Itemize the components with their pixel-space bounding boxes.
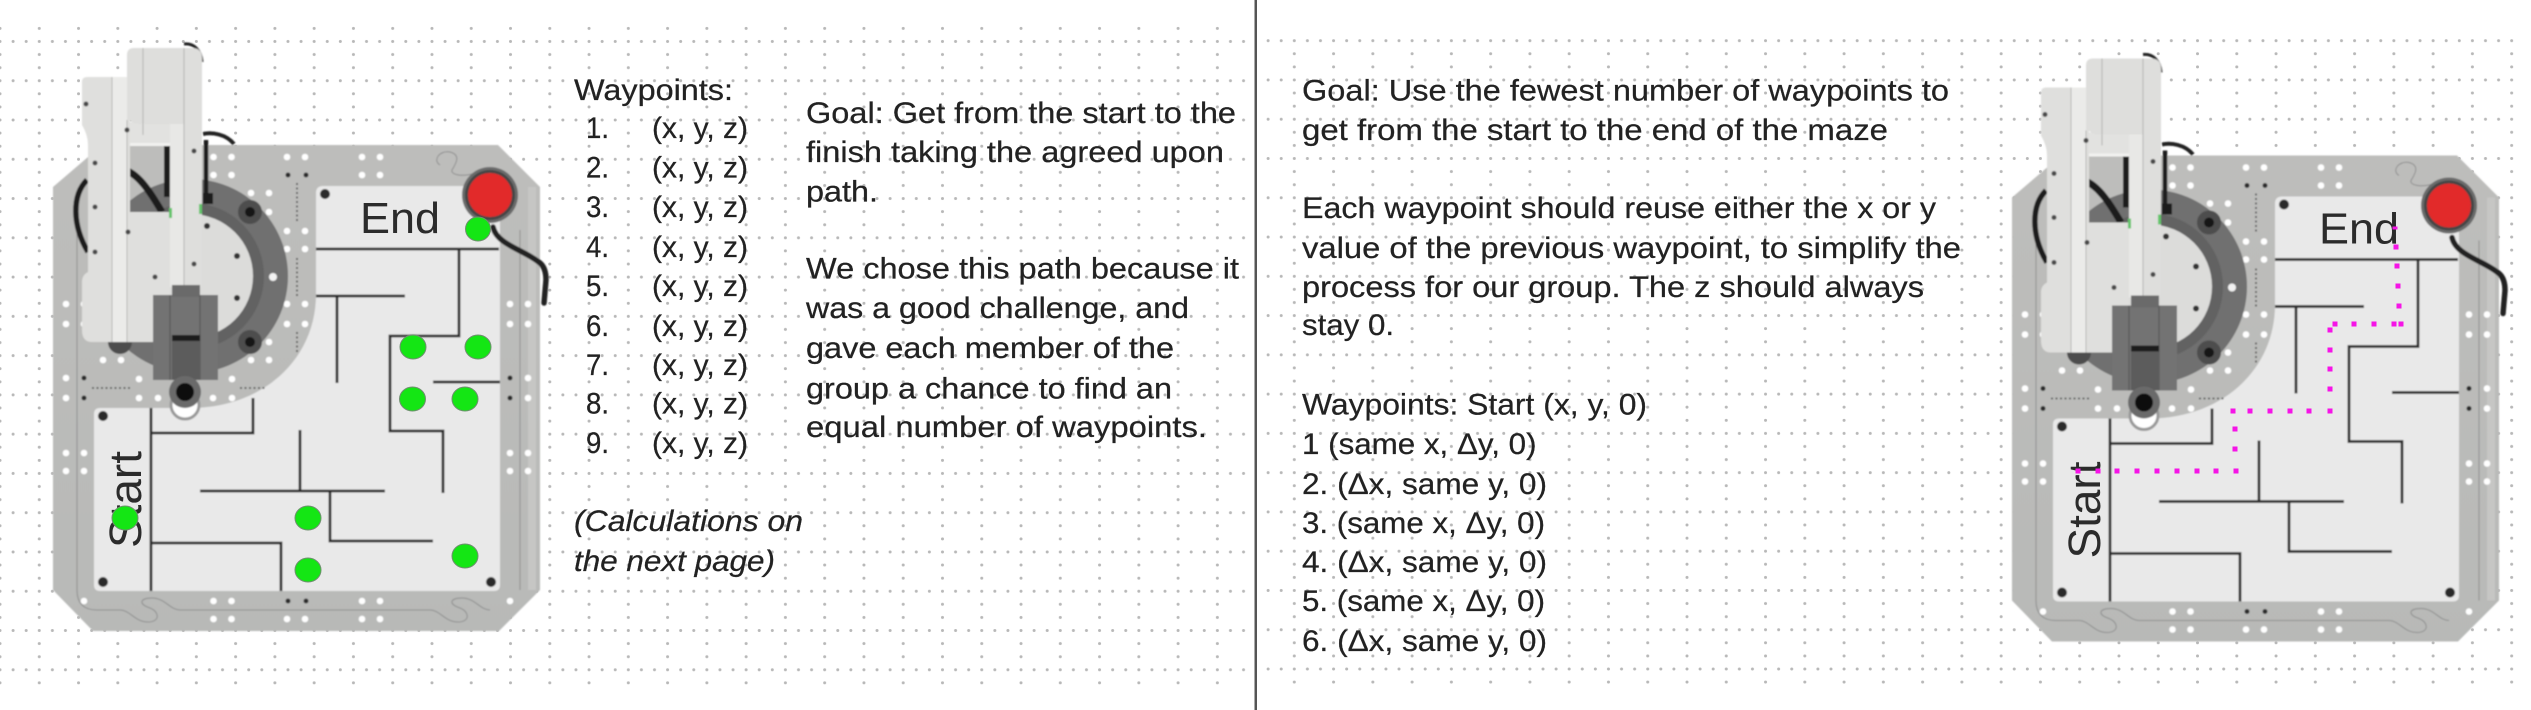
text block: right goal and waypoint rules: get from the start to the end of the maze [1302,114,1888,147]
maze and robot arm [53,44,546,631]
text block: left goal description: group a chance to find an [806,372,1172,406]
dot grid background: left page [0,26,1246,686]
text block: left goal description [805,97,1240,444]
text block: right goal and waypoint rules: 4. (Δx, same y, 0) [1302,546,1547,579]
panel: right maze board with planned path [2012,54,2505,641]
text block: waypoint list [574,74,748,460]
text block: waypoint list: (x, y, z) [652,388,748,420]
text block: waypoint list: 1. [586,112,609,145]
text block: waypoint list: 6. [586,310,609,343]
text block: right goal and waypoint rules: value of the previous waypoint, to simplify the [1302,232,1961,265]
magenta dotted path [2076,226,2404,474]
text block: waypoint list: 8. [586,388,609,420]
text block: waypoint list: 5. [586,270,609,303]
label: Start: Start [2059,461,2110,558]
text block: waypoint list: 7. [586,349,609,382]
text block: left goal description: equal number of waypoints. [806,411,1207,444]
text block: left goal description: gave each member of the [806,332,1174,365]
text block: waypoint list: (x, y, z) [652,152,748,184]
text block: right goal and waypoint rules: 6. (Δx, same y, 0) [1302,625,1547,658]
maze and robot arm [2012,54,2505,641]
text block: waypoint list: 3. [586,191,609,224]
text block: left goal description: was a good challenge, and [805,292,1189,325]
text block: waypoint list: (x, y, z) [652,112,748,145]
text block: right goal and waypoint rules: 1 (same x, Δy, 0) [1302,428,1536,461]
text block: right goal and waypoint rules [1302,74,1961,658]
text block: waypoint list: (x, y, z) [652,231,748,264]
text block: left goal description: We chose this path because it [806,252,1240,286]
text block: right goal and waypoint rules: 3. (same x, Δy, 0) [1302,507,1545,540]
text block: left goal description: Goal: Get from the start to the [806,97,1236,130]
text block: waypoint list: 4. [586,231,609,264]
text block: right goal and waypoint rules: 2. (Δx, same y, 0) [1302,468,1547,501]
text block: calculations note: (Calculations on [574,505,803,538]
text block: left goal description: finish taking the agreed upon [806,136,1224,169]
text block: right goal and waypoint rules: Goal: Use the fewest number of waypoints to [1302,74,1949,108]
text block: waypoint list: (x, y, z) [652,349,748,382]
text block: waypoint list: (x, y, z) [652,270,748,303]
text block: waypoint list: Waypoints: [574,74,733,107]
text block: waypoint list: 9. [586,427,609,460]
text block: left goal description: path. [806,176,878,208]
label: End: End [2319,204,2399,254]
text block: right goal and waypoint rules: process for our group. The z should always [1302,271,1924,304]
text block: waypoint list: (x, y, z) [652,427,748,460]
text block: calculations note: the next page) [574,545,775,578]
text block: calculations note [574,505,803,578]
text block: waypoint list: (x, y, z) [652,191,748,224]
label: End: End [360,194,440,243]
panel: left maze board with waypoints [53,44,546,631]
text block: right goal and waypoint rules: 5. (same x, Δy, 0) [1302,585,1545,618]
text block: right goal and waypoint rules: Waypoints: Start (x, y, 0) [1302,388,1647,422]
text block: waypoint list: 2. [586,152,609,184]
text block: right goal and waypoint rules: Each waypoint should reuse either the x or y [1302,192,1936,225]
text block: waypoint list: (x, y, z) [652,310,748,343]
text block: right goal and waypoint rules: stay 0. [1302,309,1394,342]
dot grid background: right page [1266,39,2514,686]
label: Start: Start [100,451,151,548]
green waypoint markers [112,217,491,582]
page divider line [1254,0,1257,710]
